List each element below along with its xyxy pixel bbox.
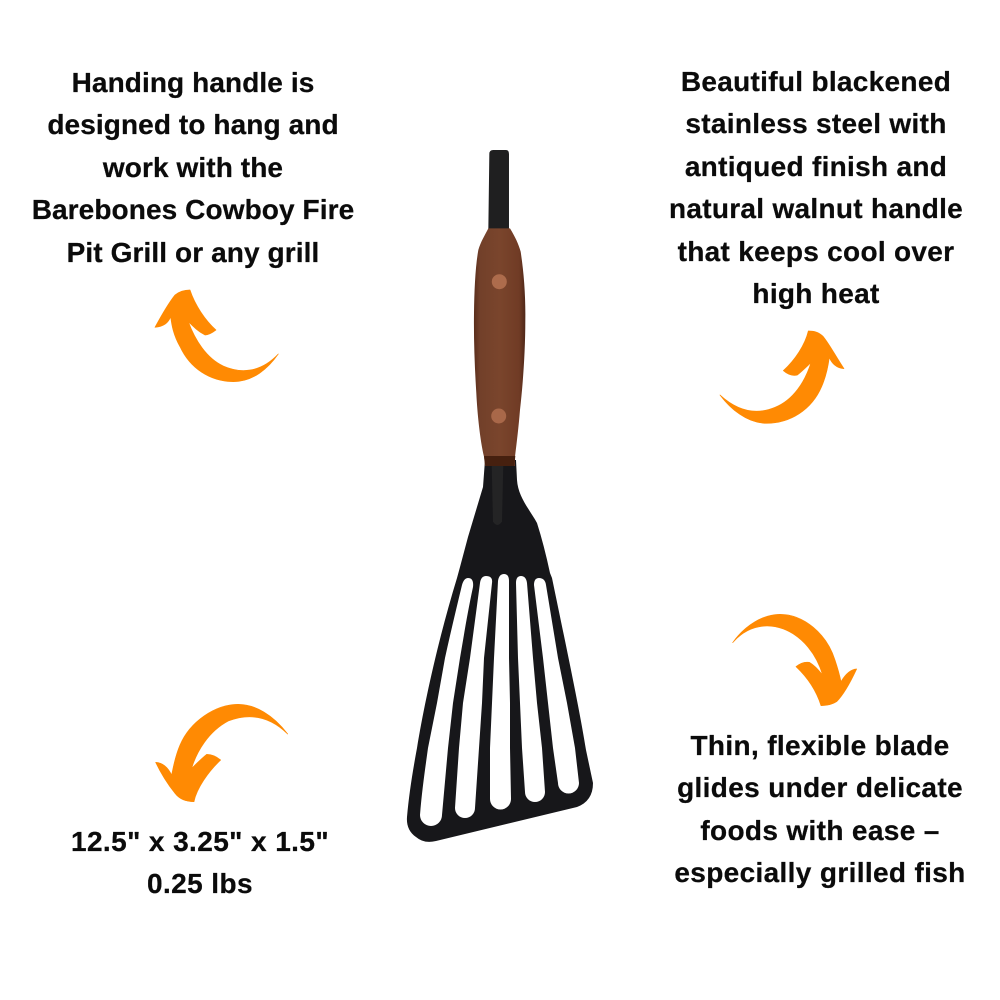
text: blackened steel: Beautiful blackened <box>681 66 951 97</box>
arrow: top right <box>720 331 844 423</box>
text: flexible blade <box>674 730 966 888</box>
hanging hook <box>488 150 509 230</box>
arrow: bottom left <box>156 704 288 802</box>
icon: spatula <box>407 150 593 842</box>
text: dimensions <box>71 826 329 899</box>
text: blackened steel <box>669 66 963 310</box>
text: blackened steel: that keeps cool over <box>678 236 954 267</box>
text: blackened steel: high heat <box>752 278 880 309</box>
text: flexible blade: especially grilled fish <box>674 857 966 888</box>
text: dimensions: 12.5" x 3.25" x 1.5" <box>71 826 329 857</box>
blade neck rib <box>492 463 503 525</box>
handle collar <box>484 456 515 466</box>
text: hanging handle: designed to hang and <box>47 109 339 140</box>
rivet: lower <box>491 408 506 424</box>
text: flexible blade: foods with ease – <box>700 815 940 846</box>
rivet: upper <box>492 274 507 289</box>
wooden handle <box>474 228 525 466</box>
text: flexible blade: Thin, flexible blade <box>690 730 950 761</box>
text: flexible blade: glides under delicate <box>677 772 963 803</box>
text: hanging handle: work with the <box>103 152 283 183</box>
text: blackened steel: antiqued finish and <box>685 151 947 182</box>
arrow: top left <box>155 290 278 382</box>
text: blackened steel: natural walnut handle <box>669 193 963 224</box>
blade <box>407 460 593 842</box>
text: hanging handle: Pit Grill or any grill <box>67 237 319 268</box>
text: hanging handle: Handing handle is <box>72 67 314 98</box>
text: hanging handle: Barebones Cowboy Fire <box>32 194 354 225</box>
text: hanging handle <box>32 67 354 268</box>
text: blackened steel: stainless steel with <box>685 108 947 139</box>
arrow: bottom right <box>733 614 857 706</box>
text: dimensions: 0.25 lbs <box>147 868 253 899</box>
